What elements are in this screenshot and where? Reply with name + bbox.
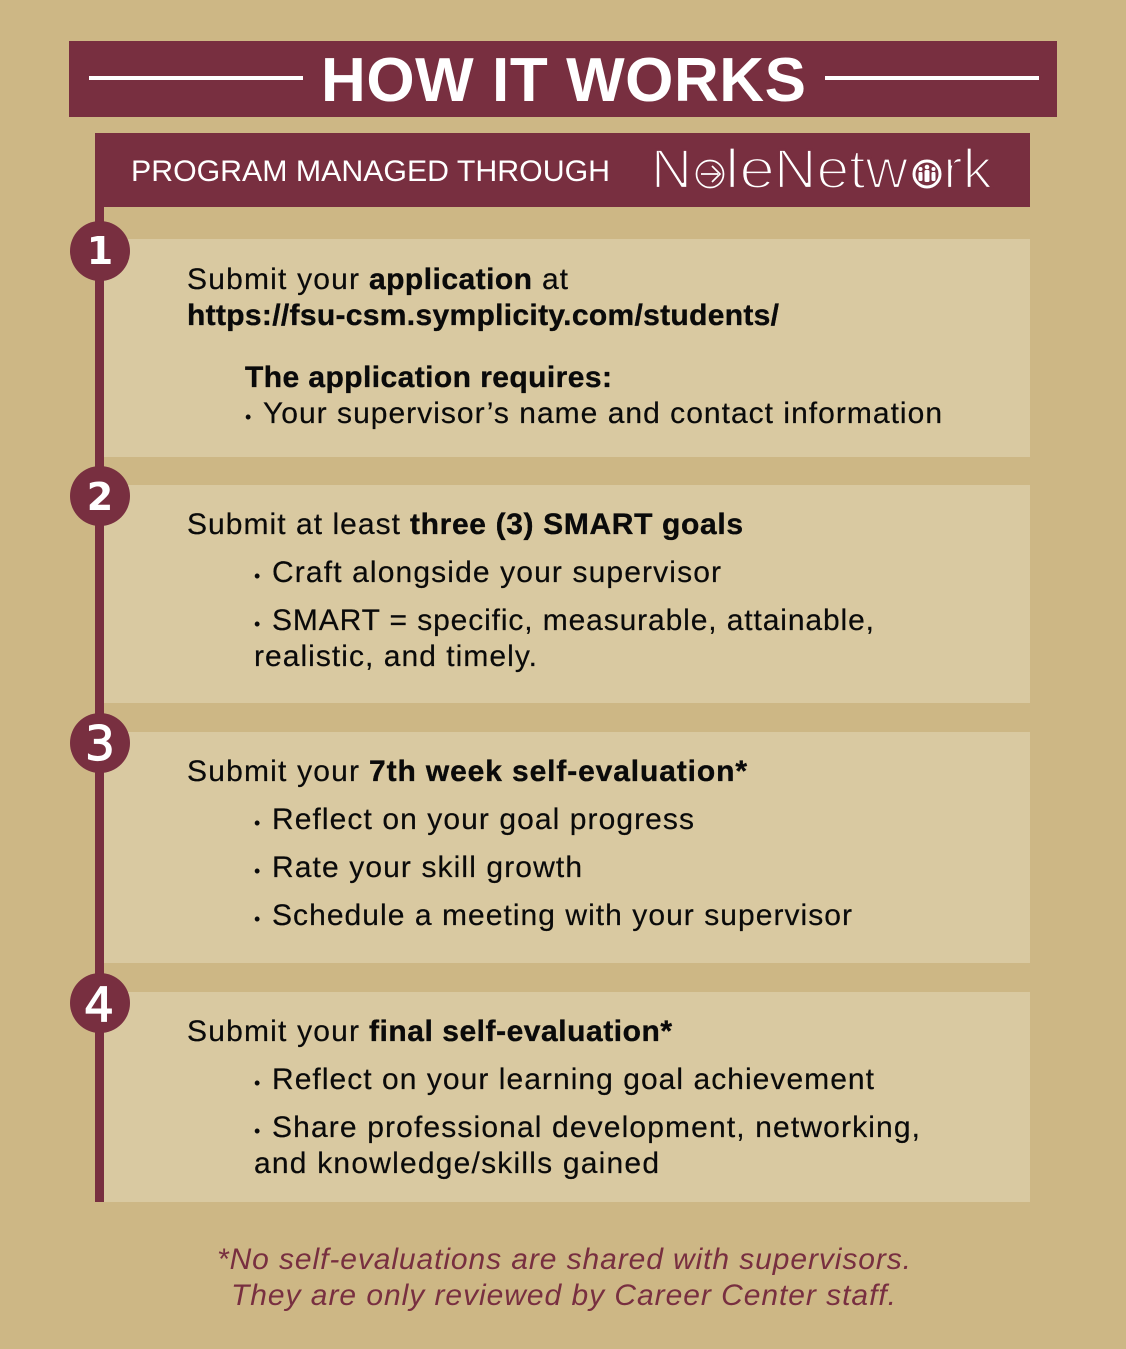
step 4 bullets: • (254, 1121, 260, 1141)
step 1 requirements (245, 361, 942, 430)
step 3 bullets (254, 803, 852, 932)
step 2 heading: Submit at least (187, 508, 401, 541)
step number 4: 4 (84, 978, 114, 1033)
header text: PROGRAM MANAGED THROUGH (131, 155, 610, 188)
step 3 bullets: Rate your skill growth (272, 851, 582, 884)
step number 3: 3 (85, 717, 115, 772)
step 1 intro: at (542, 263, 569, 296)
step 2 bullets: SMART = specific, measurable, attainable, (272, 604, 874, 637)
step 4 bullets (254, 1063, 920, 1180)
step 2 heading: three (3) SMART goals (410, 508, 743, 541)
panel: step 1 (104, 239, 1030, 457)
title: HOW IT WORKS (321, 46, 806, 115)
footnote: They are only reviewed by Career Center staff. (231, 1279, 896, 1312)
logo: NoleNetwork: N (651, 137, 692, 200)
step 3 bullets: • (254, 909, 260, 929)
step 2 bullets: realistic, and timely. (254, 640, 537, 673)
logo: NoleNetwork: Netw (774, 137, 909, 200)
step 3 heading: Submit your (187, 755, 359, 788)
icon: arrow circle (696, 160, 724, 188)
step 1 requirements: • (245, 407, 251, 427)
step 2 heading (187, 508, 743, 541)
step 4 bullets: Reflect on your learning goal achievement (272, 1063, 875, 1096)
step 4 bullets: • (254, 1073, 260, 1093)
step 3 heading: 7th week self-evaluation* (369, 755, 747, 788)
step 3 heading (187, 755, 747, 788)
step 4 bullets: and knowledge/skills gained (254, 1147, 659, 1180)
step 4 heading: final self-evaluation* (369, 1015, 672, 1048)
step 2 bullets: • (254, 566, 260, 586)
footnote (217, 1243, 911, 1312)
logo: NoleNetwork: rk (943, 137, 993, 200)
step 4 bullets: Share professional development, networking, (272, 1111, 920, 1144)
icon: people circle (914, 161, 940, 187)
timeline spine (95, 133, 104, 1202)
panel: step 3 (104, 732, 1030, 963)
step 4 heading: Submit your (187, 1015, 359, 1048)
step 1 requirements: Your supervisor’s name and contact information (263, 397, 942, 430)
step number 4 (70, 973, 130, 1033)
panel: step 2 (104, 485, 1030, 703)
footnote: *No self-evaluations are shared with supervisors. (217, 1243, 911, 1276)
step 3 bullets: • (254, 813, 260, 833)
step number 3 (70, 713, 130, 773)
step 3 bullets: Schedule a meeting with your supervisor (272, 899, 852, 932)
step 2 bullets: • (254, 614, 260, 634)
title banner (69, 41, 1057, 117)
step number 2 (70, 466, 130, 526)
step 2 bullets: Craft alongside your supervisor (272, 556, 721, 589)
step 1 requirements: The application requires: (245, 361, 612, 394)
step 2 bullets (254, 556, 874, 673)
step 4 heading (187, 1015, 672, 1048)
logo: NoleNetwork (651, 137, 993, 200)
panel: step 4 (104, 992, 1030, 1202)
step 1 intro: Submit your (187, 263, 359, 296)
step 3 bullets: • (254, 861, 260, 881)
step 3 bullets: Reflect on your goal progress (272, 803, 694, 836)
step number 1: 1 (87, 229, 113, 273)
step 1 intro (187, 263, 780, 332)
step number 2: 2 (87, 475, 113, 519)
header: program managed through (95, 133, 1030, 207)
logo: NoleNetwork: le (725, 137, 775, 200)
step number 1 (70, 221, 130, 281)
step 1 intro: https://fsu-csm.symplicity.com/students/ (187, 299, 780, 332)
step 1 intro: application (369, 263, 532, 296)
